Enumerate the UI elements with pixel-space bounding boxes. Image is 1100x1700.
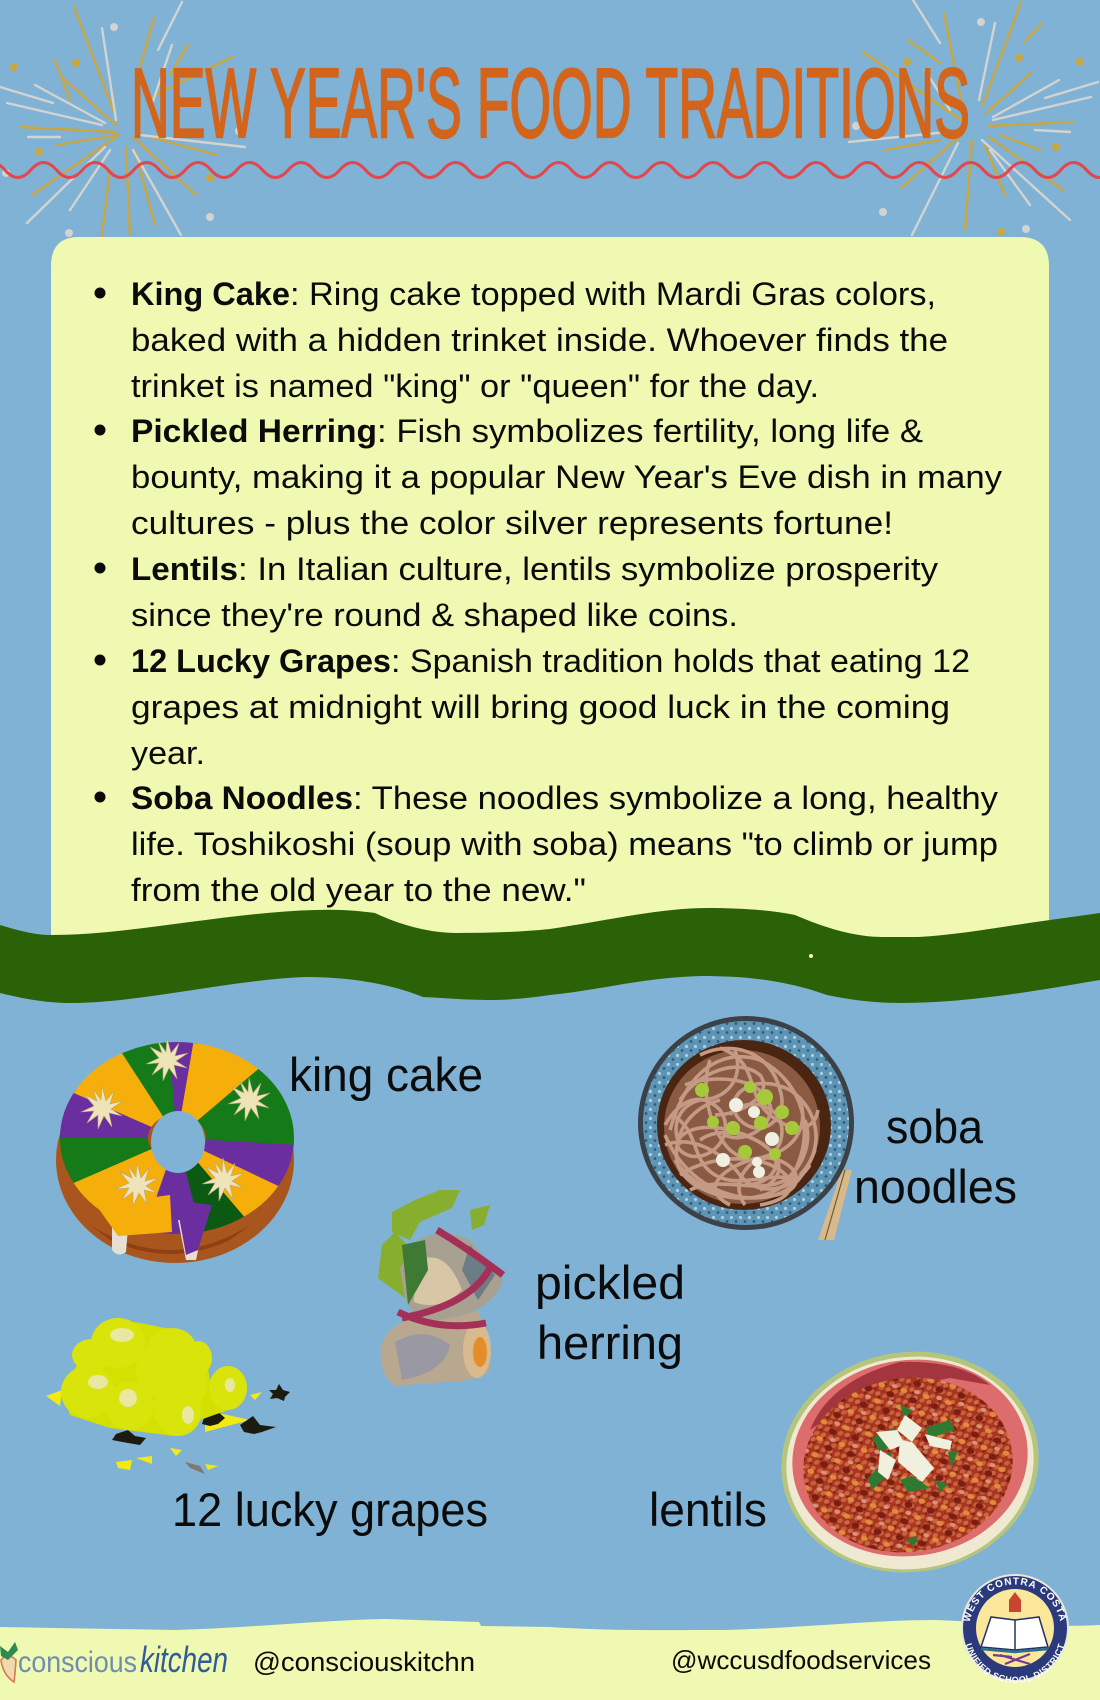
- bullet: pickled herring: bounty, making it a popular New Year's Eve dish in many: [131, 459, 1002, 495]
- left firework: [0, 2, 245, 250]
- food: 12 lucky grapes: [46, 1318, 290, 1474]
- label: lentils: lentils: [649, 1483, 767, 1536]
- food: lentils bowl: [767, 1335, 1053, 1589]
- panel: food traditions list: [51, 237, 1049, 945]
- logo: West Contra Costa Unified School District seal: UNIFIED SCHOOL DISTRICT: [966, 1643, 1064, 1683]
- bullet: soba noodles: Soba Noodles: [131, 780, 353, 816]
- bullet: king cake: trinket is named "king" or "queen" for the day.: [131, 368, 819, 404]
- bullet: pickled herring: [94, 413, 1002, 541]
- bullet: lentils: since they're round & shaped like coins.: [131, 597, 738, 633]
- label: soba noodles: [854, 1100, 1017, 1213]
- bullet: pickled herring: cultures - plus the color silver represents fortune!: [131, 505, 893, 541]
- handle: consciouskitchn: @consciouskitchn: [253, 1647, 475, 1677]
- handle: wccusdfoodservices: @wccusdfoodservices: [671, 1645, 931, 1675]
- label: soba noodles: noodles: [854, 1160, 1017, 1213]
- bullet: king cake: : Ring cake topped with Mardi Gras colors,: [290, 276, 936, 312]
- bullet: 12 lucky grapes: grapes at midnight will bring good luck in the coming: [131, 689, 950, 725]
- food: king cake: [56, 1038, 294, 1263]
- bullet: soba noodles: from the old year to the new.": [131, 872, 586, 908]
- label: soba noodles: soba: [886, 1100, 984, 1153]
- bullet: 12 lucky grapes: year.: [131, 735, 205, 771]
- bullet: soba noodles: : These noodles symbolize a long, healthy: [353, 780, 998, 816]
- logo: conscious kitchen: kitchen: [140, 1639, 228, 1680]
- right firework: [849, 0, 1098, 236]
- bullet: pickled herring: : Fish symbolizes fertility, long life &: [377, 413, 923, 449]
- bullet: 12 lucky grapes: 12 Lucky Grapes: [131, 643, 391, 679]
- icon: carrot: [0, 1642, 18, 1682]
- food: soba noodles: [638, 1016, 854, 1240]
- bullet: soba noodles: life. Toshikoshi (soup with soba) means "to climb or jump: [131, 826, 998, 862]
- bullet: lentils: Lentils: [131, 551, 238, 587]
- label: pickled herring: pickled: [535, 1256, 685, 1309]
- label: 12 lucky grapes: 12 lucky grapes: [172, 1483, 488, 1536]
- bullet: king cake: King Cake: [131, 276, 290, 312]
- bullet: pickled herring: Pickled Herring: [131, 413, 377, 449]
- bullet: lentils: : In Italian culture, lentils symbolize prosperity: [238, 551, 938, 587]
- bullet: soba noodles: [94, 780, 998, 908]
- bullet: 12 lucky grapes: : Spanish tradition holds that eating 12: [391, 643, 970, 679]
- wavy red divider: [0, 162, 1100, 178]
- label: king cake: king cake: [289, 1048, 483, 1101]
- logo: West Contra Costa Unified School District seal: WEST CONTRA COSTA: [962, 1578, 1066, 1622]
- logo: West Contra Costa Unified School District seal: [961, 1574, 1069, 1683]
- label: pickled herring: [535, 1256, 685, 1369]
- logo: conscious kitchen: conscious: [18, 1646, 137, 1679]
- bullet: 12 lucky grapes: [94, 643, 970, 771]
- bullet: lentils: [94, 551, 938, 633]
- green wavy band: [0, 908, 1100, 1003]
- food: pickled herring: [378, 1190, 503, 1386]
- logo: conscious kitchen: [0, 1639, 228, 1682]
- bullet: king cake: baked with a hidden trinket inside. Whoever finds the: [131, 322, 948, 358]
- bullet: king cake: [94, 276, 948, 404]
- footer band: [0, 1619, 1100, 1700]
- label: pickled herring: herring: [537, 1316, 683, 1369]
